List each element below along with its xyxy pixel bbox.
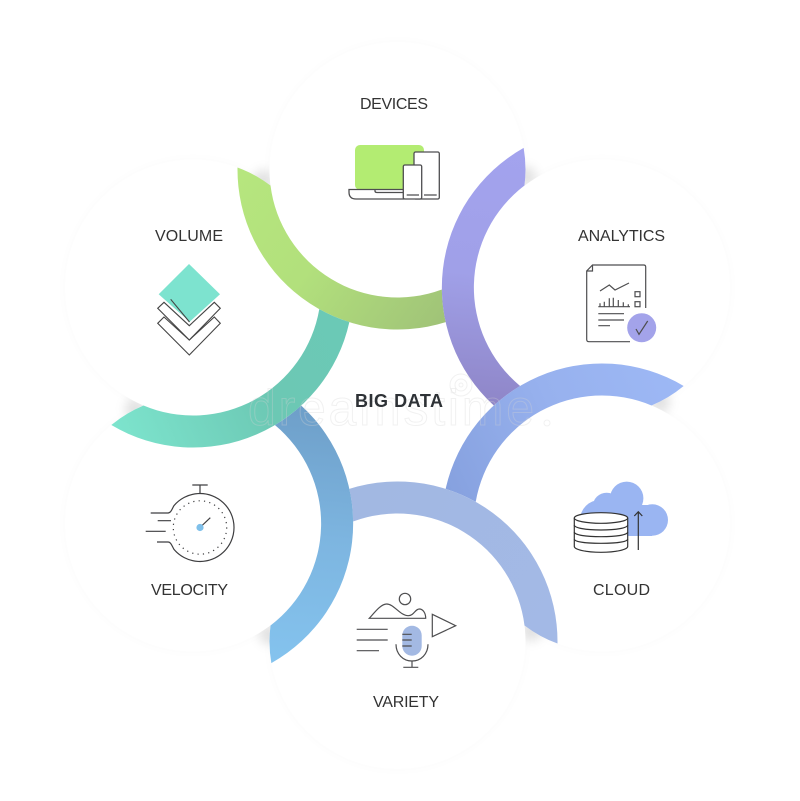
ring: devices (green) <box>237 167 446 330</box>
heading: analytics: ANALYTICS <box>578 228 665 245</box>
icon: stopwatch <box>146 485 234 562</box>
panel: cloud <box>574 482 668 599</box>
panel: devices <box>349 96 439 199</box>
ring: cloud (blue) <box>439 305 684 566</box>
heading: devices: DEVICES <box>360 96 428 113</box>
watermark: dreamstime <box>248 380 534 436</box>
icon: image, play, text and microphone <box>357 593 456 667</box>
panel: variety <box>357 593 456 711</box>
heading: velocity: VELOCITY <box>151 582 228 599</box>
icon: database and cloud upload <box>574 482 668 552</box>
icon: report with check <box>587 265 656 342</box>
ring: velocity (sky blue) <box>167 402 412 663</box>
ring: variety (periwinkle) <box>349 481 558 644</box>
heading: variety: VARIETY <box>373 694 439 711</box>
ring: analytics (purple) <box>383 148 628 409</box>
icon: laptop, tablet and phone <box>349 145 439 199</box>
soft shadows behind circles <box>65 42 730 769</box>
white circles <box>65 42 730 769</box>
panel: velocity <box>146 485 234 599</box>
panel: volume <box>155 228 223 355</box>
ring: volume (teal) <box>111 245 356 506</box>
panel: analytics <box>578 228 665 342</box>
title: big data: BIG DATA <box>355 391 443 411</box>
heading: volume: VOLUME <box>155 228 223 245</box>
heading: cloud: CLOUD <box>593 582 650 599</box>
icon: stacked layers <box>158 264 220 355</box>
